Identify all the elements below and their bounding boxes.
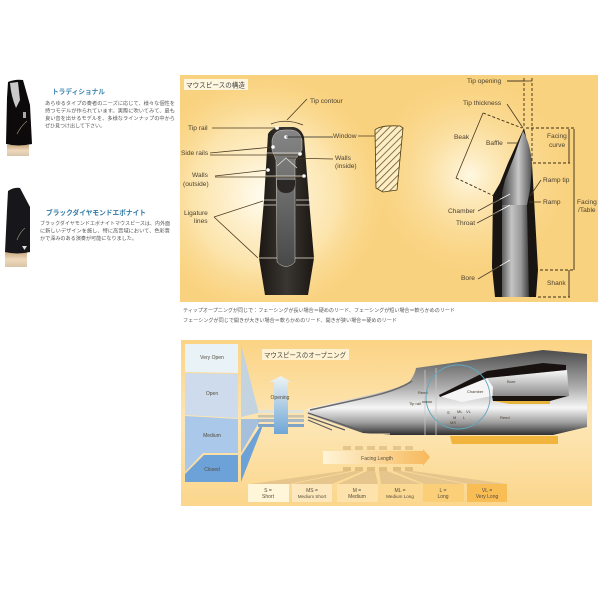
- diagram: mouthpiece side section: Chamber: [467, 389, 484, 394]
- callouts: side view labels: Shank: [547, 280, 566, 287]
- chart: opening scale blocks: Very Open: [200, 355, 224, 361]
- caption: facing notes: ティップオープニングが同じで：フェーシングが長い場合＝硬めのリード、フェーシングが短い場合＝軟らかめのリード: [183, 307, 455, 314]
- chart: opening scale blocks: [185, 344, 304, 482]
- callouts: side view labels: Ramp: [543, 199, 561, 206]
- callouts: front view labels: Walls: [335, 155, 352, 162]
- diagram: mouthpiece side section: MS: [450, 420, 456, 425]
- callouts: side view labels: Throat: [456, 220, 475, 227]
- chart: opening scale blocks: Closed: [204, 467, 220, 473]
- heading: black diamond ebonite: ブラックダイヤモンドエボナイト: [46, 208, 146, 217]
- text: traditional description: 持つモデルが作られています。実際に吹いてみて、最も: [45, 108, 175, 114]
- text: black diamond description: かで深みのある演奏が可能になりました。: [40, 235, 137, 242]
- diagram: side view mouthpiece: [492, 128, 538, 297]
- callouts: front view labels: Side rails: [181, 150, 209, 157]
- callouts: side view labels: curve: [549, 142, 565, 149]
- panel title: anatomy: [184, 79, 248, 90]
- diagram: mouthpiece side section: M: [453, 415, 456, 420]
- callouts: side view labels: Tip opening: [467, 78, 502, 85]
- panel: mouthpiece opening: [181, 340, 592, 506]
- chart: opening scale blocks: Medium: [203, 433, 221, 439]
- diagram: mouthpiece side section: ML: [457, 409, 463, 414]
- callouts: side view labels: Beak: [454, 134, 470, 141]
- legend: facing length categories: S =: [264, 488, 272, 494]
- legend: facing length categories: Short: [262, 494, 275, 500]
- caption: facing notes: [183, 307, 455, 324]
- panel title: opening: [262, 349, 349, 360]
- legend: facing length categories: L =: [440, 488, 447, 494]
- callouts: side view labels: Facing: [547, 133, 567, 140]
- legend: facing length categories: [248, 484, 507, 502]
- legend: facing length categories: Medium Long: [386, 494, 414, 499]
- legend: facing length categories: VL =: [482, 488, 492, 494]
- callouts: side view labels: Chamber: [448, 208, 476, 215]
- callouts: side view labels: Facing: [577, 199, 597, 206]
- text: traditional description: あらゆるタイプの奏者のニーズに応じて、様々な個性を: [45, 100, 175, 107]
- text: traditional description: 良い音を出せるモデルを、多様なラインナップの中から: [45, 115, 175, 122]
- diagram: mouthpiece side section: [307, 350, 587, 444]
- callouts: front view labels: lines: [194, 218, 208, 225]
- caption: facing notes: フェーシングが同じで開きが大きい場合＝軟らかめのリード、開きが狭い場合＝硬めのリード: [183, 317, 397, 324]
- arrow: opening: [269, 376, 291, 434]
- callouts: front view labels: (outside): [183, 181, 209, 188]
- diagram: mouthpiece side section: Reed: [418, 390, 428, 395]
- legend: facing length categories: ML =: [394, 488, 406, 494]
- text: black diamond description: [40, 220, 170, 242]
- text: traditional description: [45, 100, 175, 130]
- text: black diamond description: ブラックダイヤモンドエボナイトマウスピースは、内外面: [40, 220, 170, 227]
- callouts: front view labels: [181, 98, 392, 258]
- callouts: side view labels: Tip thickness: [463, 100, 502, 107]
- legend: facing length categories: Very Long: [476, 494, 498, 500]
- heading: traditional: トラディショナル: [52, 87, 105, 96]
- callouts: front view labels: Tip rail: [188, 125, 208, 132]
- legend: facing length categories: MS =: [306, 488, 318, 494]
- callouts: front view labels: (inside): [335, 163, 357, 170]
- diagram: front view mouthpiece: [259, 127, 314, 295]
- icon: black diamond ebonite mouthpiece photo: [5, 188, 30, 267]
- legend: facing length categories: M =: [353, 488, 361, 494]
- chart: opening scale blocks: Open: [206, 391, 218, 397]
- text: black diamond description: に新しいデザインを施し、特に高音域において、色彩豊: [40, 228, 170, 234]
- arrow: facing length: [250, 446, 507, 484]
- diagram: mouthpiece side section: S: [447, 410, 450, 415]
- panel title: anatomy: マウスピースの構造: [186, 80, 245, 90]
- arrow: facing length: Facing Length: [361, 456, 393, 462]
- text: traditional description: ぜひ見つけ出して下さい。: [45, 122, 105, 130]
- arrow: opening: Opening: [271, 395, 290, 401]
- icon: traditional mouthpiece photo: [6, 80, 32, 156]
- diagram: mouthpiece side section: VL: [466, 409, 472, 414]
- panel: mouthpiece anatomy: [180, 75, 598, 302]
- legend: facing length categories: Medium Short: [298, 494, 327, 499]
- callouts: front view labels: Ligature: [184, 210, 208, 217]
- diagram: reed cross-section: [375, 126, 403, 192]
- callouts: side view labels: /Table: [578, 207, 596, 214]
- legend: facing length categories: Long: [437, 494, 449, 500]
- legend: facing length categories: Medium: [348, 494, 366, 500]
- callouts: side view labels: [448, 78, 597, 297]
- diagram: mouthpiece side section: Tip rail: [409, 401, 421, 406]
- callouts: front view labels: Walls: [192, 172, 209, 179]
- callouts: side view labels: Baffle: [486, 140, 503, 147]
- diagram: mouthpiece side section: Reed: [500, 415, 510, 420]
- callouts: side view labels: Ramp tip: [543, 177, 570, 184]
- diagram: mouthpiece side section: Bore: [507, 379, 516, 384]
- callouts: front view labels: Tip contour: [310, 98, 344, 105]
- callouts: front view labels: Window: [333, 133, 357, 140]
- callouts: side view labels: Bore: [461, 275, 475, 282]
- diagram: mouthpiece side section: L: [463, 415, 466, 420]
- panel title: opening: マウスピースのオープニング: [264, 350, 346, 360]
